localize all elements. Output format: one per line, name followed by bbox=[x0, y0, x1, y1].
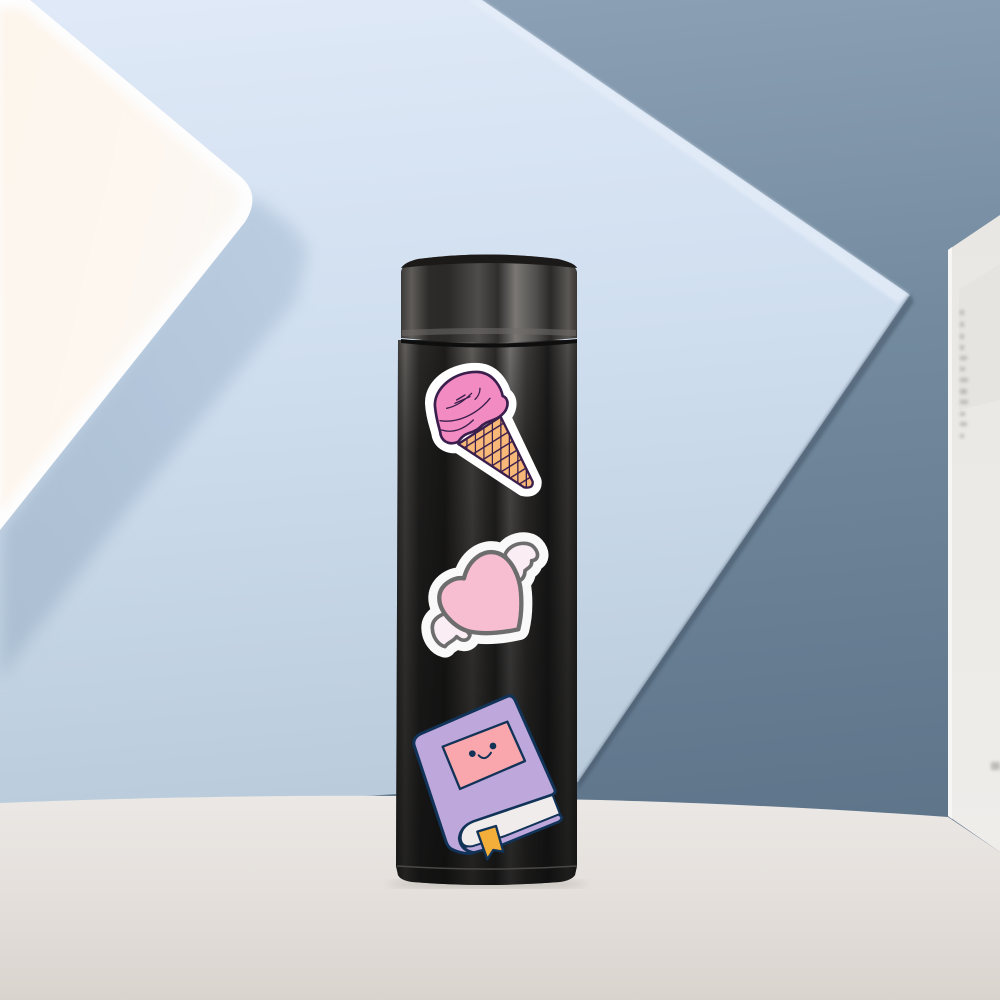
sticker: ice cream cone bbox=[434, 372, 533, 488]
upper wing bbox=[505, 543, 538, 581]
bottle lid bbox=[401, 254, 577, 342]
smile face bbox=[469, 743, 496, 758]
sticker: winged heart bbox=[432, 543, 538, 647]
book body bbox=[414, 696, 555, 853]
die-cut border bbox=[432, 543, 538, 647]
scoop texture bbox=[440, 388, 490, 431]
bottle shadow on table bbox=[387, 880, 587, 888]
heart bbox=[439, 552, 521, 633]
sticker: purple book with smiling face bbox=[414, 696, 562, 859]
pages bbox=[461, 795, 560, 846]
cover label bbox=[443, 722, 525, 789]
lower wing bbox=[432, 613, 470, 647]
cone bbox=[458, 417, 533, 488]
scoop bbox=[435, 372, 508, 443]
shadow of white panel bbox=[0, 195, 308, 680]
bottle bbox=[396, 254, 577, 885]
back cover bbox=[453, 813, 562, 853]
bookmark ribbon bbox=[477, 826, 503, 859]
right side book bbox=[948, 215, 1000, 852]
light blue paper sheet bbox=[0, 0, 914, 820]
white rounded panel bbox=[0, 0, 252, 530]
die-cut border bbox=[434, 372, 533, 488]
bottle body bbox=[396, 340, 577, 885]
blurred book text bbox=[960, 310, 1000, 770]
table surface bbox=[0, 796, 1000, 1000]
